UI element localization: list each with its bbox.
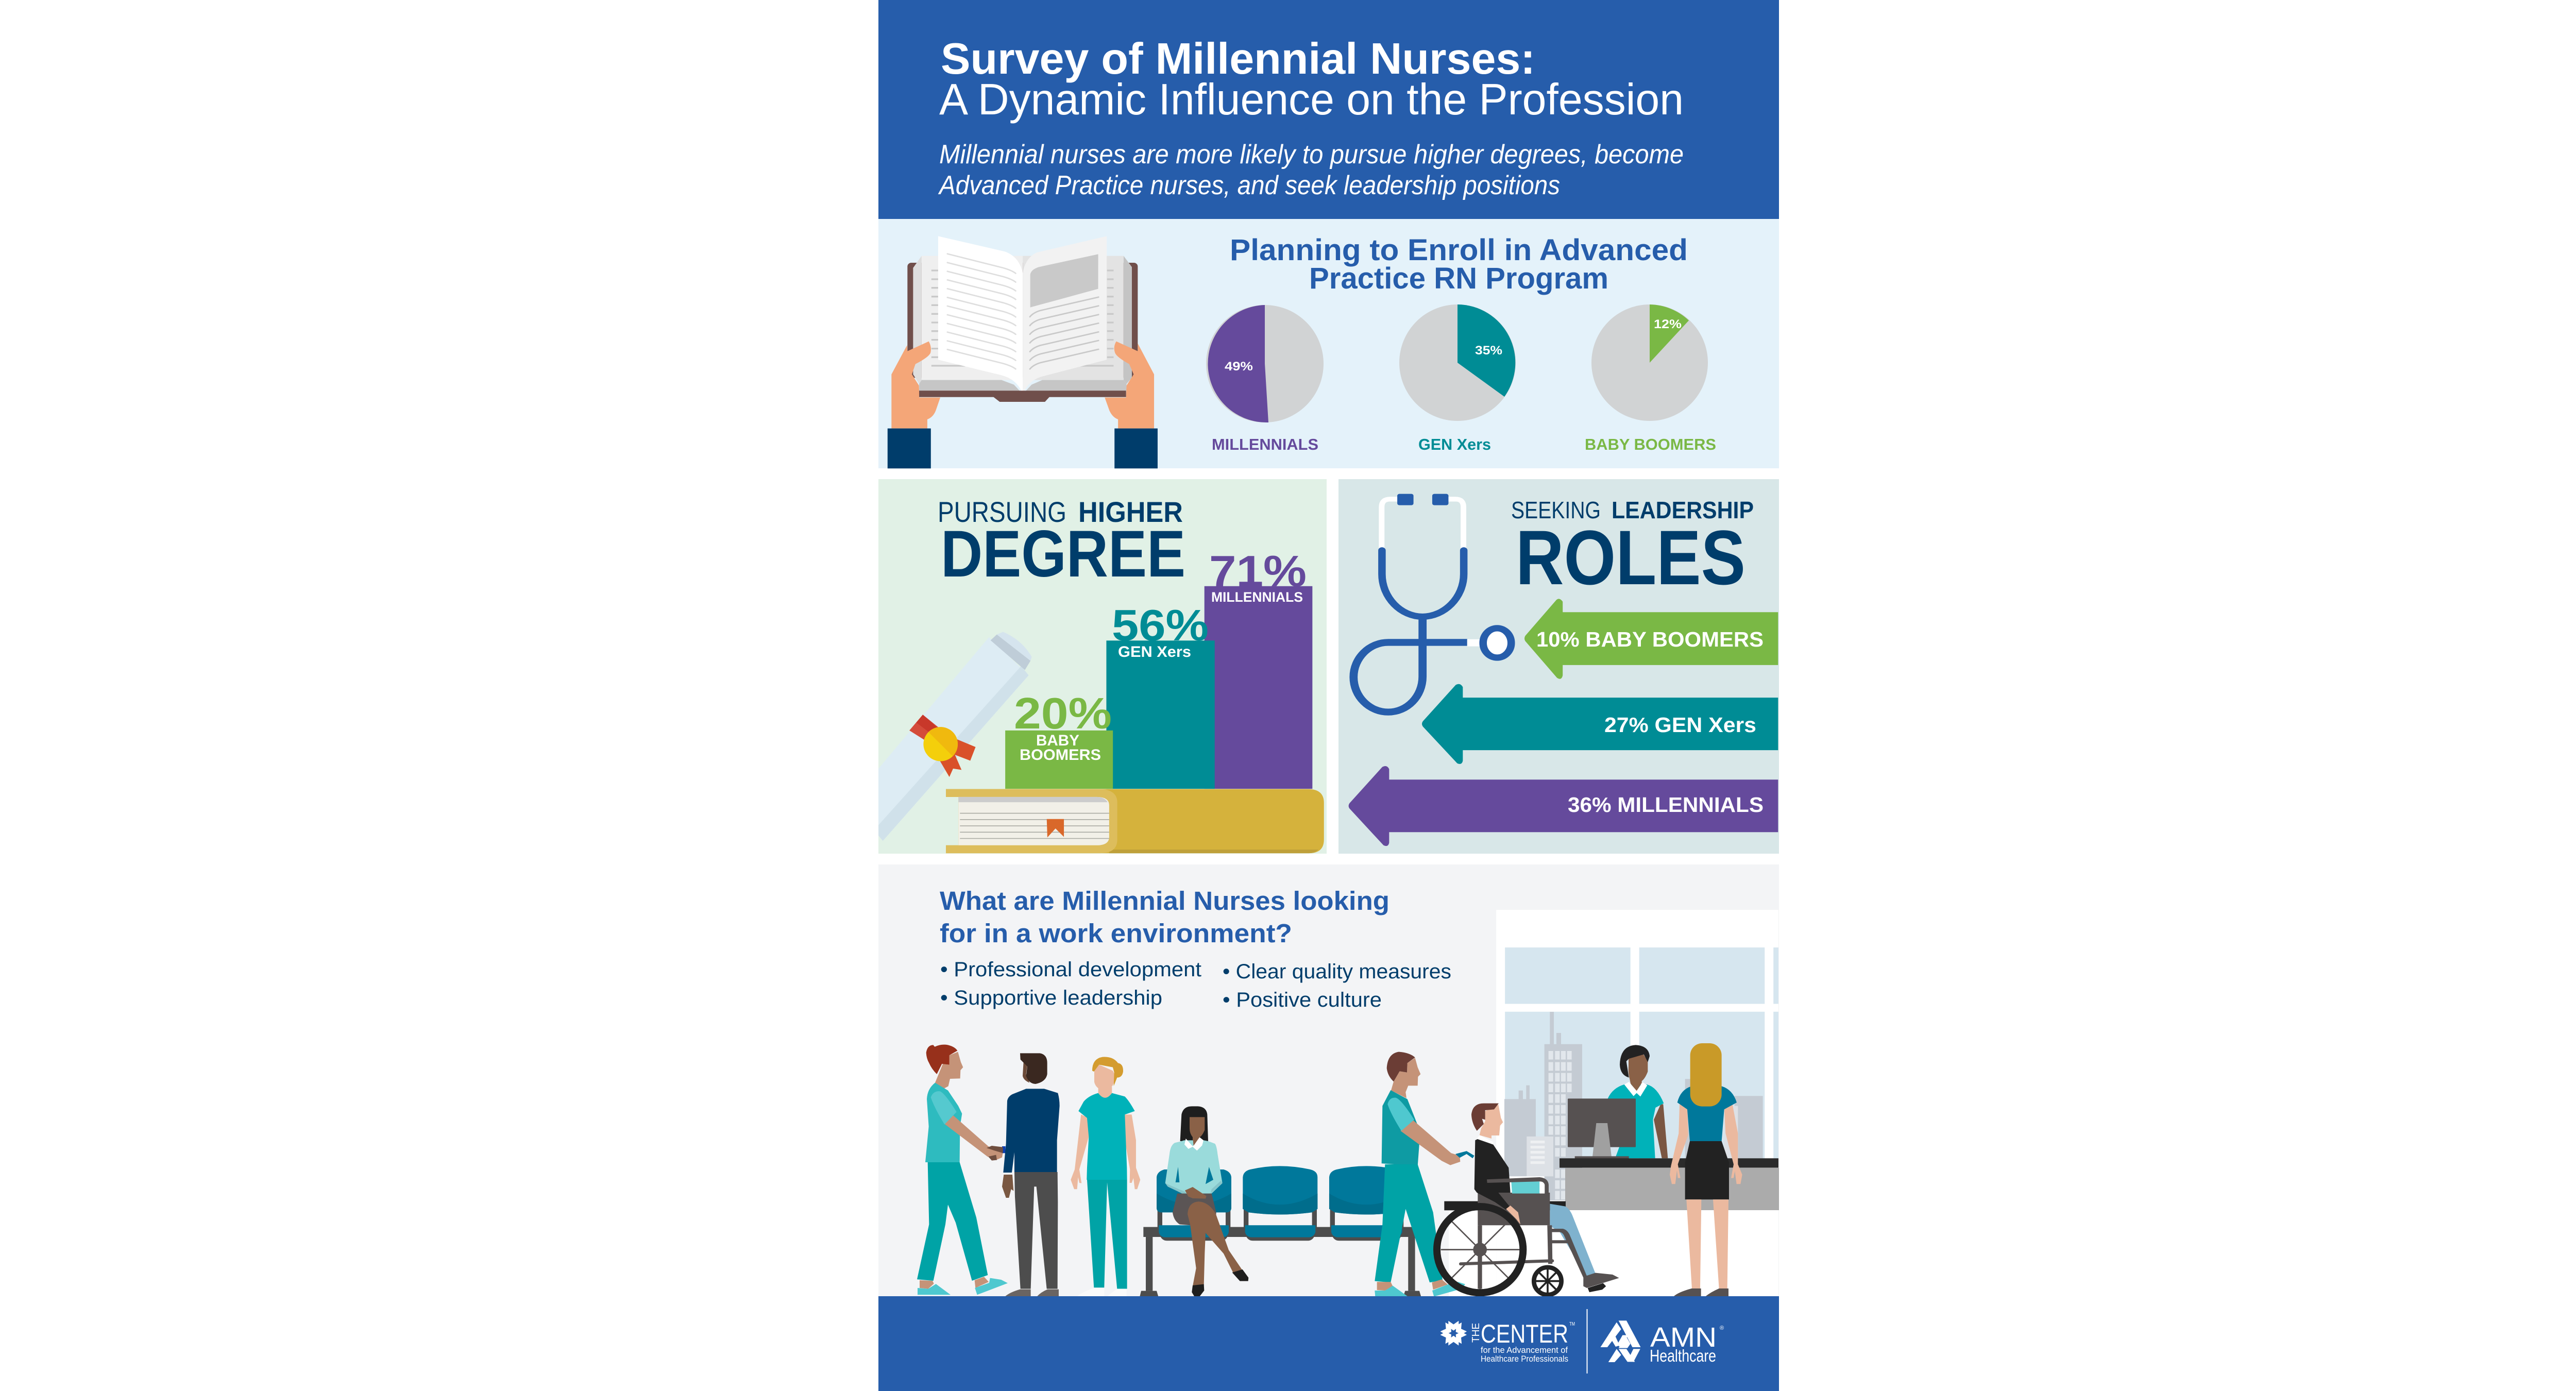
arrow: 36% millennials [1349, 766, 1778, 846]
panel: advanced practice program [878, 219, 1779, 468]
logo: the center: TM [1569, 1321, 1575, 1327]
panel: work environment [878, 864, 1779, 1297]
logo: the center: Healthcare Professionals [1481, 1354, 1568, 1364]
panel: pursuing higher degree [878, 479, 1327, 854]
heading: Planning to Enroll in Advanced [1230, 233, 1688, 267]
pie chart: gen xers 35% [1399, 304, 1516, 453]
bar chart: BOOMERS [1020, 747, 1101, 764]
pie chart: millennials 49% [1206, 305, 1324, 453]
illustration: seated woman [1165, 1106, 1248, 1297]
bar chart: MILLENNIALS [1211, 589, 1303, 605]
bar chart: 20% [1014, 689, 1112, 738]
logo: amn healthcare [1600, 1320, 1724, 1365]
heading: ROLES [1516, 514, 1745, 601]
bullet list [940, 958, 1451, 1011]
illustration: nurse pushing wheelchair [1375, 1052, 1475, 1297]
logo: the center: for the Advancement of [1481, 1345, 1568, 1355]
heading: LEADERSHIP [1612, 497, 1754, 523]
bar chart: BABY [1036, 732, 1079, 749]
subtitle [938, 140, 1684, 200]
illustration: nurse shaking hands [917, 1045, 1008, 1295]
icon: stethoscope [1353, 494, 1511, 712]
arrow: 36% millennials: 36% MILLENNIALS [1568, 793, 1764, 817]
pie chart: gen xers 35%: GEN Xers [1418, 435, 1491, 453]
illustration: standing nurse [1071, 1057, 1140, 1297]
bar chart: 56% [1112, 601, 1209, 650]
arrow: 27% gen xers [1422, 684, 1778, 764]
logo: the center: THE [1470, 1323, 1482, 1343]
logo: amn healthcare: AMN [1650, 1322, 1717, 1353]
pie chart: baby boomers 12%: BABY BOOMERS [1585, 435, 1716, 453]
subtitle: Millennial nurses are more likely to pursue higher degrees, become [939, 140, 1684, 169]
icon: closed book [946, 789, 1324, 853]
arrow: 27% gen xers: 27% GEN Xers [1604, 713, 1756, 737]
illustration: reception window and city [1449, 910, 1779, 1297]
heading: DEGREE [941, 517, 1185, 591]
bullet list: • Positive culture [1223, 989, 1382, 1011]
illustration: wheelchair and patient [1437, 1104, 1619, 1295]
bullet list: • Clear quality measures [1223, 960, 1451, 983]
pie chart: baby boomers 12%: 12% [1654, 317, 1682, 331]
bar chart: GEN Xers [1118, 643, 1191, 660]
icon: diploma scroll [878, 632, 1032, 841]
pie chart: gen xers 35%: 35% [1475, 344, 1502, 358]
heading [1230, 233, 1688, 295]
heading: What are Millennial Nurses looking [940, 886, 1389, 915]
title: Survey of Millennial Nurses: [941, 35, 1535, 83]
bullet list: • Professional development [940, 958, 1201, 981]
logo: amn healthcare: Healthcare [1650, 1346, 1716, 1365]
heading: PURSUING [938, 496, 1066, 528]
illustration: woman at reception [1670, 1043, 1742, 1297]
pie chart: millennials 49%: MILLENNIALS [1212, 435, 1318, 453]
logo: the center: CENTER [1481, 1319, 1568, 1348]
divider [1587, 1309, 1588, 1373]
heading: SEEKING [1511, 497, 1601, 523]
subtitle: Advanced Practice nurses, and seek leadership positions [938, 171, 1560, 200]
icon: hands holding open book [888, 236, 1158, 468]
bar chart: 71% [1209, 547, 1307, 596]
pie chart: baby boomers 12% [1585, 304, 1716, 453]
panel: header [878, 0, 1779, 219]
title: A Dynamic Influence on the Profession [939, 75, 1684, 124]
illustration: waiting chairs [1140, 1166, 1421, 1297]
illustration: man in navy sweater [987, 1053, 1060, 1297]
pie chart: millennials 49%: 49% [1225, 360, 1253, 374]
heading: Practice RN Program [1309, 262, 1608, 295]
footer [878, 1296, 1779, 1391]
bar chart [1005, 547, 1312, 789]
heading [938, 496, 1185, 591]
title [939, 35, 1684, 124]
bullet list: • Supportive leadership [940, 987, 1162, 1009]
logo: amn healthcare: ® [1720, 1325, 1724, 1331]
heading: for in a work environment? [940, 919, 1292, 948]
arrow: 10% baby boomers [1524, 599, 1778, 679]
illustration: reception desk and receptionist [1560, 1045, 1778, 1168]
heading: HIGHER [1078, 496, 1183, 528]
arrow: 10% baby boomers: 10% BABY BOOMERS [1536, 627, 1764, 651]
logo: the center [1440, 1319, 1575, 1364]
panel: seeking leadership roles [1338, 479, 1779, 854]
heading [940, 886, 1389, 948]
